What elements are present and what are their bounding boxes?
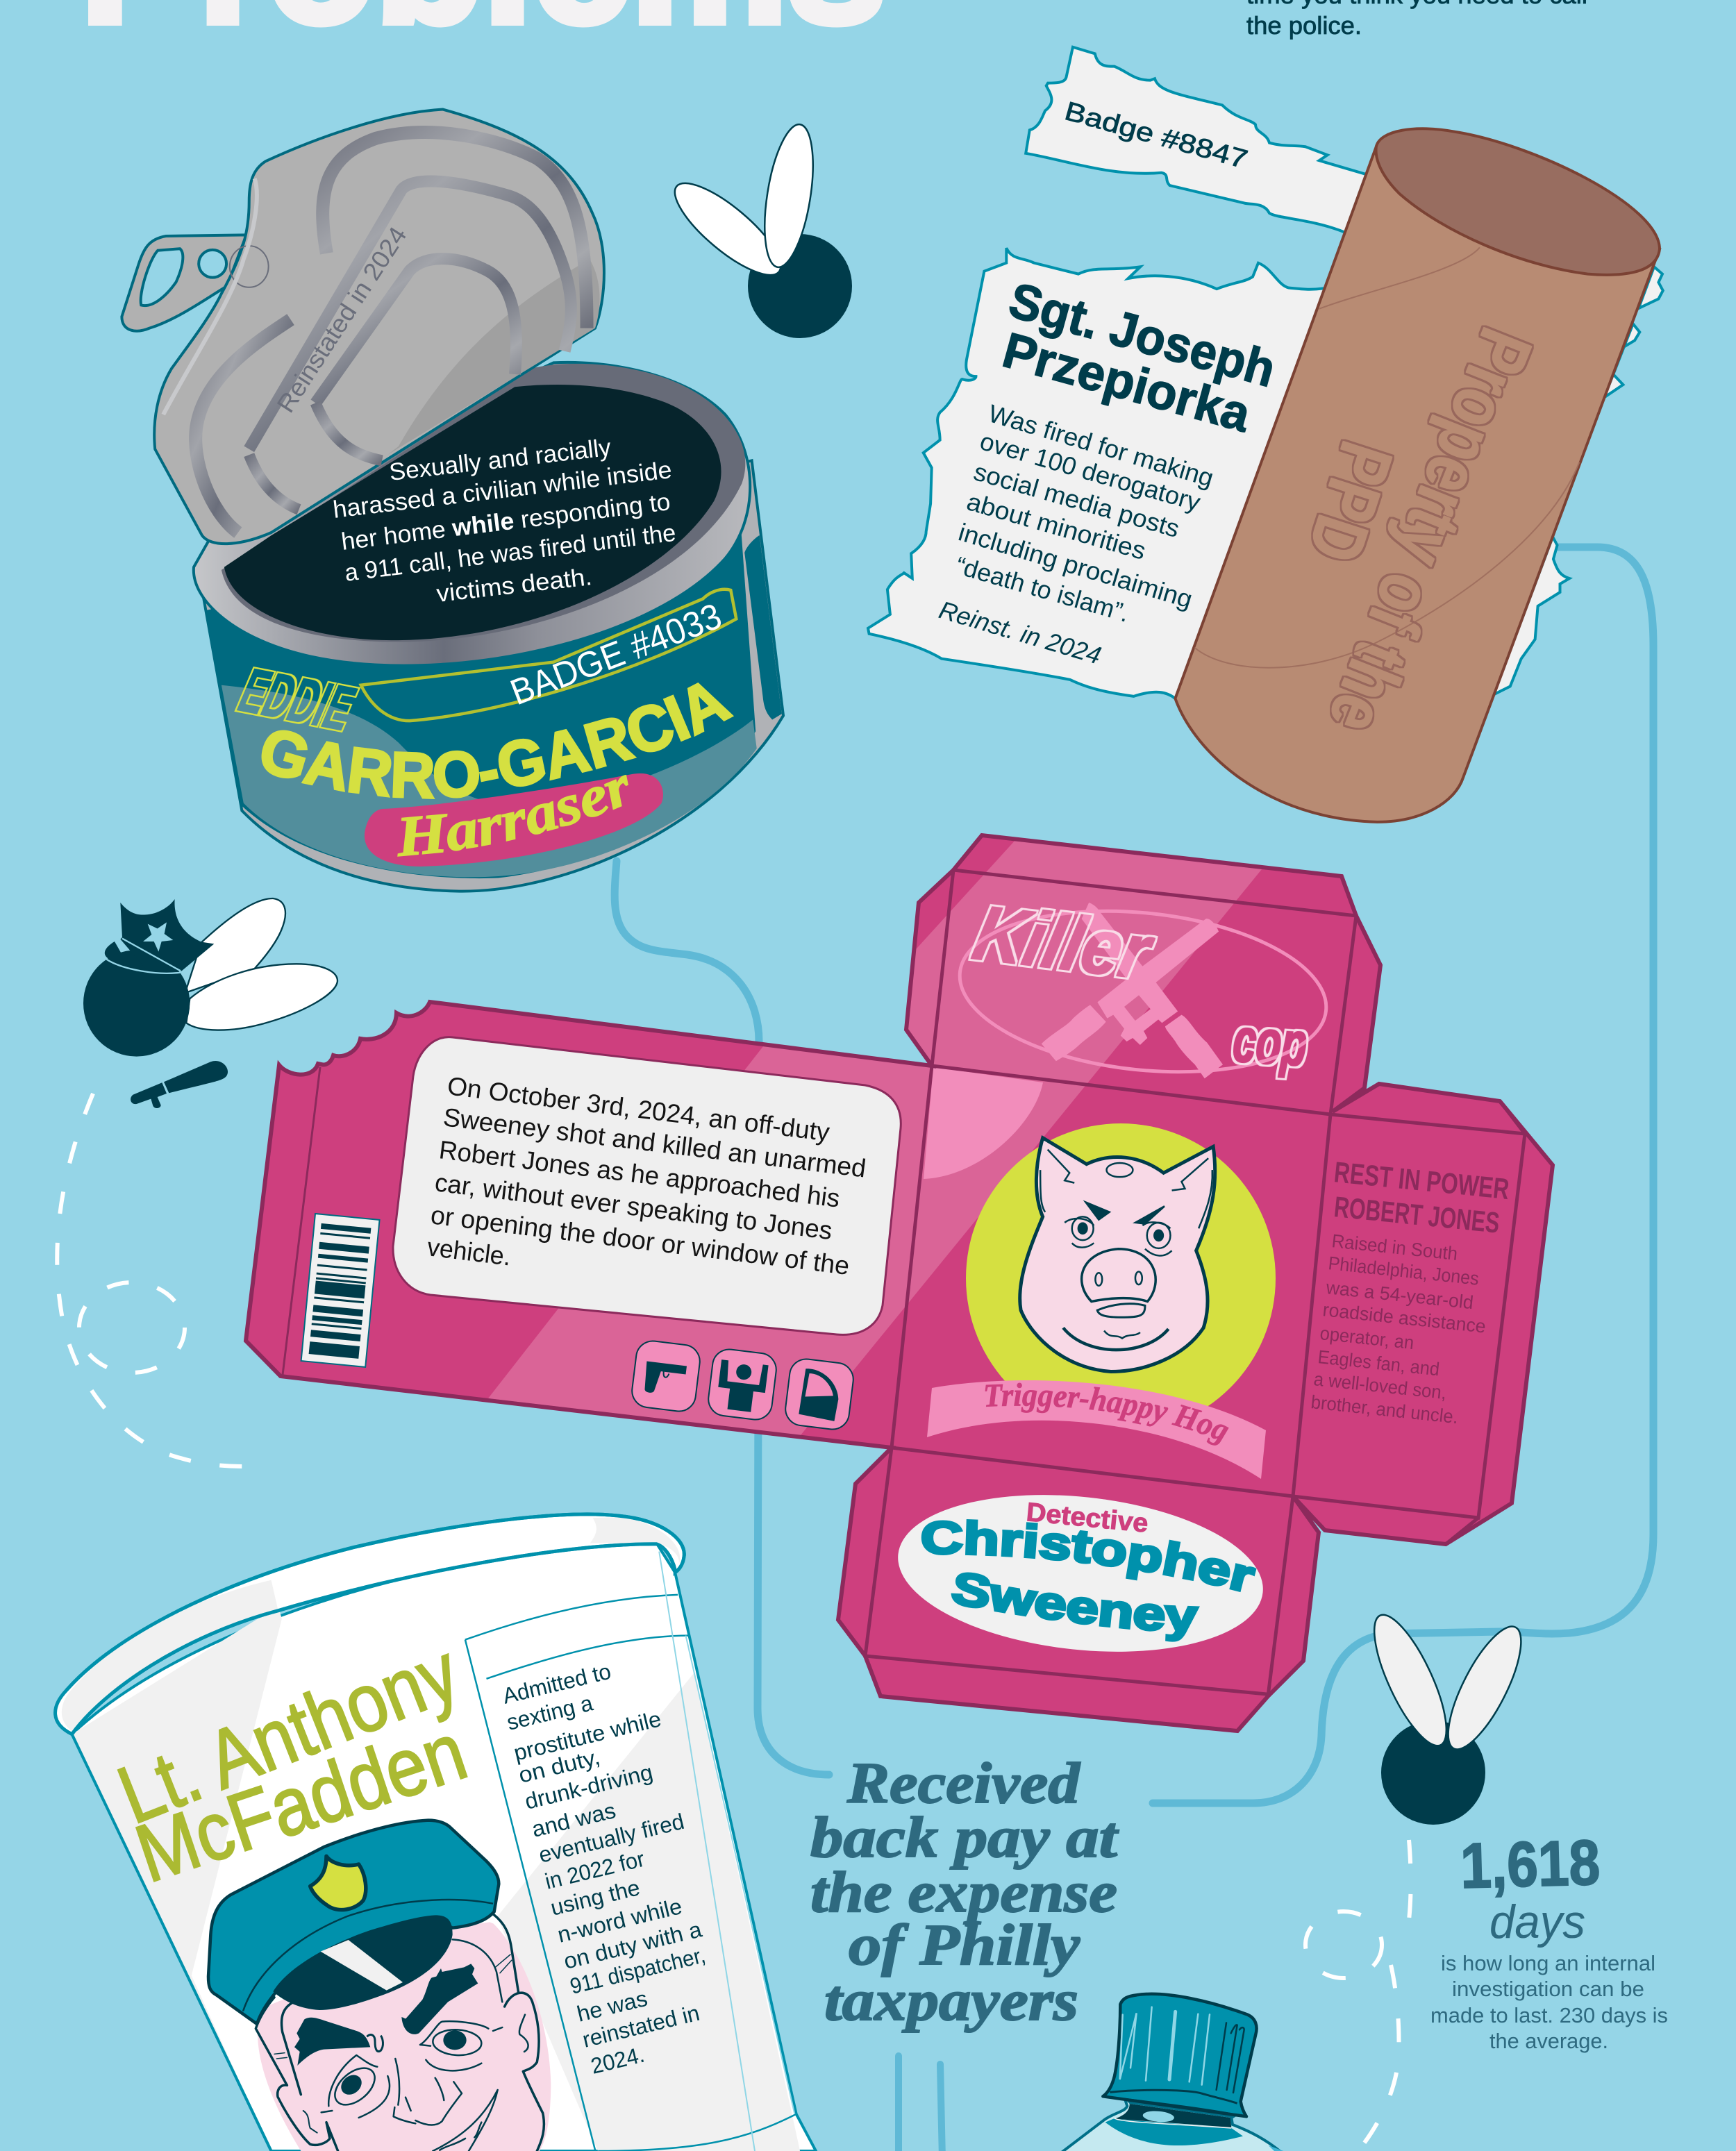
statistic: 1,618 days <box>1430 1827 1668 2053</box>
Killer Cop ellipse logo <box>952 889 1334 1089</box>
fly top <box>663 121 852 338</box>
cardboard tube <box>1175 128 1660 822</box>
side panel: rest in power: a well-loved son, <box>1312 1369 1447 1403</box>
back pay callout <box>810 1751 1119 2033</box>
officer description <box>500 1659 708 2079</box>
officer description: reinstated in <box>580 2000 702 2052</box>
officer description: including proclaiming <box>955 517 1196 614</box>
tube stamp: Property of the <box>1313 317 1549 745</box>
back pay callout: taxpayers <box>824 1968 1078 2033</box>
back pay callout: back pay at <box>810 1805 1119 1870</box>
officer name: Lt. Anthony <box>106 1626 471 1841</box>
back pay callout: Received <box>846 1751 1081 1816</box>
baton <box>164 1061 228 1093</box>
box base <box>246 835 1553 1731</box>
banner text: Trigger-happy Hog <box>985 1383 1229 1446</box>
surname: GARRO-GARCIA <box>261 683 734 799</box>
icon: gun <box>630 1339 702 1413</box>
can top description: harassed a civilian while inside <box>331 456 673 524</box>
badge text: Badge #8847 <box>1062 97 1251 175</box>
side panel: rest in power: was a 54-year-old <box>1324 1277 1474 1313</box>
officer description: Admitted to <box>500 1659 613 1709</box>
fly right <box>1360 1607 1535 1825</box>
story text: On October 3rd, 2024, an off-duty <box>446 1071 831 1147</box>
officer description: n-word while <box>555 1893 685 1948</box>
icon: person hands up <box>706 1348 778 1421</box>
Harraser label: Harraser <box>397 775 628 857</box>
can top description: a 911 call, he was fired until the <box>343 519 677 587</box>
officer description: using the <box>548 1875 642 1920</box>
back pay callout: the expense <box>810 1860 1117 1925</box>
officer description: about minorities <box>964 487 1149 565</box>
statistic: 1,618 days: investigation can be <box>1452 1977 1644 2001</box>
officer description: social media posts <box>971 457 1183 543</box>
pig mascot <box>1020 1138 1215 1372</box>
statistic: 1,618 days: made to last. 230 days is <box>1430 2003 1668 2027</box>
side panel: rest in power: Eagles fan, and <box>1317 1346 1441 1380</box>
officer description: Was fired for making <box>985 399 1217 492</box>
officer description: 911 dispatcher, <box>567 1942 708 1999</box>
officer description <box>936 399 1217 670</box>
dashed flight path left <box>57 1094 244 1466</box>
story text: Robert Jones as he approached his <box>437 1135 842 1213</box>
torn papers <box>868 47 1663 698</box>
story panel <box>393 1037 901 1334</box>
side panel: rest in power <box>1310 1155 1511 1428</box>
officer description: he was <box>574 1986 650 2027</box>
Killer Cop ellipse logo: cop <box>1231 1005 1309 1080</box>
officer description: Reinst. in 2024 <box>936 595 1105 670</box>
side panel: rest in power: operator, an <box>1319 1323 1415 1353</box>
icon: car door <box>783 1357 856 1431</box>
can top description: victims death. <box>435 563 593 608</box>
dashed flight path right <box>1305 1840 1411 2145</box>
can top description: Sexually and racially <box>387 434 612 486</box>
tin can: Garro-Garcia <box>120 108 785 893</box>
officer description: sexting a <box>504 1690 595 1735</box>
statistic: 1,618 days: 1,618 <box>1460 1827 1601 1902</box>
Killer Cop ellipse logo: Killer <box>967 889 1162 996</box>
crossed batons <box>1042 903 1223 1078</box>
side panel: rest in power: brother, and uncle. <box>1310 1391 1459 1428</box>
can top description: her home while responding to <box>340 488 671 555</box>
pink cereal box: Sweeney <box>243 833 1555 1733</box>
officer description: over 100 derogatory <box>977 426 1203 517</box>
paper cup: McFadden <box>56 1514 816 2151</box>
barcode <box>301 1214 380 1367</box>
officer description: drunk-driving <box>522 1759 655 1814</box>
connector lines: bottom <box>899 2056 942 2151</box>
hat star <box>143 922 173 952</box>
connector line: tube to fly and back pay <box>1153 547 1653 1803</box>
connector line: can to back pay <box>615 861 829 1775</box>
badge number: BADGE #4033 <box>506 596 727 713</box>
side panel: rest in power: roadside assistance <box>1321 1299 1487 1337</box>
box fold lines <box>283 870 1525 1696</box>
name text <box>921 1498 1257 1642</box>
side panel: rest in power: ROBERT JONES <box>1333 1190 1501 1239</box>
officer description: 2024. <box>588 2042 646 2079</box>
water bottle <box>1055 1994 1287 2151</box>
banner <box>927 1380 1266 1479</box>
story text: vehicle. <box>426 1232 512 1271</box>
can artwork <box>122 110 783 892</box>
box highlight band <box>488 839 1262 1435</box>
cup artwork <box>56 1514 816 2151</box>
intro text <box>1246 0 1587 40</box>
story text: Sweeney shot and killed an unarmed <box>442 1103 867 1183</box>
officer name: Przepiorka <box>997 322 1257 443</box>
officer description: “death to islam”. <box>953 551 1133 628</box>
story text: or opening the door or window of the <box>429 1200 851 1280</box>
lid text: Reinstated in 2024 <box>271 221 412 417</box>
officer description: on duty, <box>516 1744 602 1788</box>
side panel: rest in power: REST IN POWER <box>1333 1155 1511 1205</box>
story text <box>426 1071 867 1280</box>
torn paper and cardboard tube <box>868 47 1663 822</box>
name ellipse <box>890 1478 1271 1668</box>
side panel: rest in power: Raised in South <box>1330 1230 1459 1264</box>
first name: EDDIE <box>229 655 365 744</box>
fly with police hat <box>83 898 337 1108</box>
story text: car, without ever speaking to Jones <box>433 1168 834 1245</box>
Harraser pill <box>365 773 663 867</box>
officer description: and was <box>529 1798 618 1842</box>
officer name <box>106 1626 477 1900</box>
intro text: the police. <box>1246 11 1362 40</box>
name text: Detective <box>1025 1498 1149 1539</box>
police cap <box>208 1821 499 2024</box>
officer name: McFadden <box>125 1705 477 1900</box>
officer description: in 2022 for <box>542 1846 647 1894</box>
name text: Sweeney <box>951 1572 1200 1642</box>
tube stamp: PPD <box>1292 433 1409 572</box>
officer description: prostitute while <box>511 1706 664 1766</box>
officer description: eventually fired <box>536 1809 687 1868</box>
pig mascot background <box>966 1123 1276 1433</box>
statistic: 1,618 days: the average. <box>1489 2029 1608 2053</box>
side panel: rest in power: Philadelphia, Jones <box>1327 1253 1480 1289</box>
can top description <box>331 434 677 608</box>
officer description: on duty with a <box>561 1916 704 1974</box>
statistic: 1,618 days: days <box>1489 1895 1585 1948</box>
box outline <box>246 835 1553 1731</box>
name text: Christopher <box>921 1519 1257 1593</box>
statistic: 1,618 days: is how long an internal <box>1441 1951 1655 1975</box>
officer name: Sgt. Joseph <box>1003 272 1281 398</box>
back pay callout: of Philly <box>849 1913 1080 1977</box>
officer face with cap <box>208 1821 551 2151</box>
